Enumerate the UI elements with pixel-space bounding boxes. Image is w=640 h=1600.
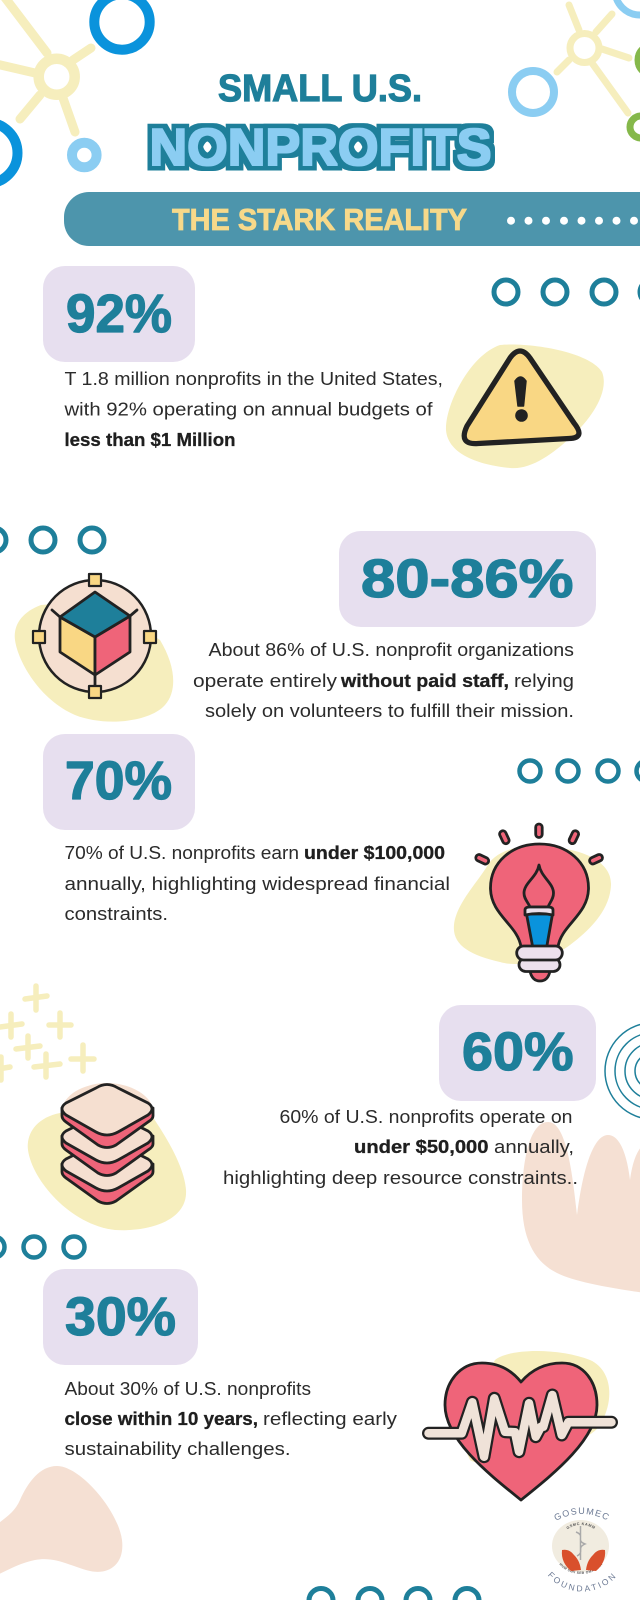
text: 92% description: less than $1 Million	[64, 430, 236, 450]
stat box: 30%	[43, 1269, 198, 1365]
logo: GOSUMEC Foundation: FOUNDATION	[548, 1572, 616, 1592]
icon: warning triangle	[446, 344, 604, 468]
title: nonprofits: NONPROFITS	[150, 119, 492, 177]
stat box: 92%: 92%	[66, 284, 172, 344]
icon: light bulb with brush	[454, 824, 611, 981]
stat box: 80-86%	[339, 531, 596, 627]
stat box: 60%	[439, 1005, 596, 1101]
stat box: 70%: 70%	[65, 751, 172, 811]
text: 80-86% description: About 86% of U.S. nonprofit organizations	[208, 640, 574, 660]
logo: GOSUMEC Foundation	[548, 1508, 616, 1592]
text: 80-86% description: without paid staff,	[340, 671, 509, 691]
panel: 80-86%	[0, 528, 596, 722]
text: 80-86% description: operate entirely	[193, 671, 337, 691]
text: 92% description: with 92% operating on annual budgets of	[63, 400, 434, 420]
text: 30% description: About 30% of U.S. nonprofits	[64, 1379, 311, 1399]
text: 80-86% description	[193, 640, 574, 721]
text: 60% description: 60% of U.S. nonprofits operate on	[280, 1107, 572, 1127]
title: small U.S.: SMALL U.S.	[218, 68, 422, 110]
icon: stacked layers	[28, 1083, 186, 1230]
decoration: plus signs	[0, 986, 94, 1080]
decoration: top-right network	[512, 0, 640, 138]
rings: row four	[0, 1236, 84, 1258]
stat box: 80-86%: 80-86%	[361, 549, 574, 609]
text: 70% description: 70% of U.S. nonprofits earn	[64, 843, 299, 863]
rings: row three	[520, 760, 640, 782]
text: 30% description: close within 10 years,	[64, 1409, 258, 1429]
panel: 60%	[28, 1005, 596, 1230]
text: 60% description: annually,	[494, 1137, 574, 1157]
logo: GOSUMEC Foundation: HUM SIRI SEB OMAIGHA	[560, 1562, 602, 1574]
icon: cube	[15, 574, 173, 722]
stat box: 70%	[43, 734, 195, 830]
text: 70% description	[64, 843, 450, 924]
text: 60% description: under $50,000	[354, 1137, 488, 1157]
text: 30% description	[64, 1379, 397, 1459]
decoration: peach hills right	[522, 1122, 640, 1293]
stat box: 30%: 30%	[65, 1287, 176, 1347]
text: 70% description: annually, highlighting widespread financial	[64, 874, 450, 894]
icon: heart with pulse	[428, 1351, 612, 1500]
rings: row one	[494, 280, 640, 304]
panel: 92%	[43, 266, 640, 468]
stat box: 60%: 60%	[462, 1022, 574, 1082]
text: 92% description	[63, 369, 443, 450]
rings: bottom row	[309, 1588, 479, 1600]
stat box: 92%	[43, 266, 195, 362]
decoration: concentric arcs	[605, 1023, 640, 1119]
banner heading: THE STARK REALITY	[172, 202, 467, 237]
text: 60% description	[223, 1107, 578, 1188]
text: 80-86% description: relying	[514, 671, 574, 691]
text: 70% description: constraints.	[64, 904, 168, 924]
rings: row two	[0, 528, 104, 552]
text: 80-86% description: solely on volunteers to fulfill their mission.	[205, 701, 574, 721]
panel: 70%	[43, 734, 640, 981]
text: 30% description: sustainability challenges.	[64, 1439, 290, 1459]
text: 70% description: under $100,000	[304, 843, 445, 863]
text: 92% description: T 1.8 million nonprofits in the United States,	[64, 369, 443, 389]
text: 30% description: reflecting early	[263, 1409, 397, 1429]
logo: GOSUMEC Foundation: GOSUMEC	[554, 1508, 609, 1520]
text: 60% description: highlighting deep resource constraints..	[223, 1168, 578, 1188]
banner: the stark reality	[64, 192, 640, 246]
decoration: peach blob bottom-left	[0, 1466, 122, 1576]
panel: 30%	[0, 1236, 612, 1500]
decoration: top-left network	[0, 0, 150, 183]
logo: GOSUMEC Foundation: GSMC KAMM	[566, 1522, 596, 1529]
